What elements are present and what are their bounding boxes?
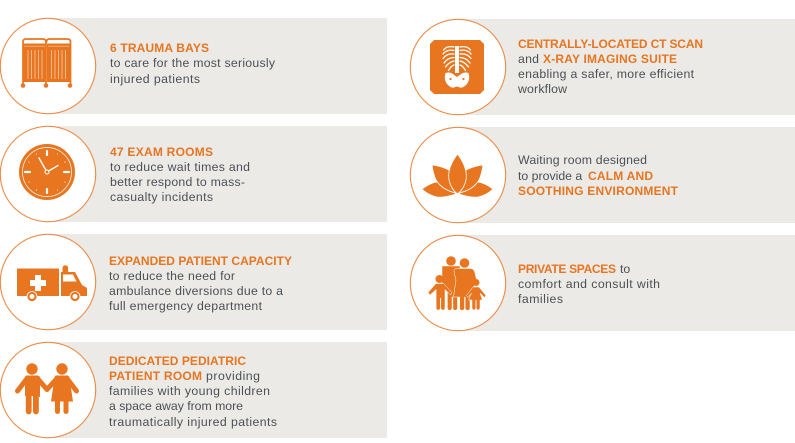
panel: exam rooms bbox=[0, 126, 387, 222]
text: exam rooms bbox=[110, 145, 250, 204]
icon: two children bbox=[18, 363, 76, 412]
text: patient capacity bbox=[109, 254, 292, 313]
text: exam rooms: 47 EXAM ROOMS bbox=[110, 145, 213, 159]
text: CT scan and X-ray: and bbox=[518, 52, 539, 66]
text: exam rooms: casualty incidents bbox=[110, 190, 213, 204]
icon: x-ray bbox=[430, 40, 484, 94]
text: patient capacity: full emergency department bbox=[109, 299, 263, 313]
text: pediatric room: a space away from more bbox=[109, 399, 243, 413]
text: private spaces: to bbox=[620, 262, 630, 276]
text: CT scan and X-ray: X-RAY IMAGING SUITE bbox=[543, 52, 677, 66]
text: pediatric room: DEDICATED PEDIATRIC bbox=[109, 354, 246, 368]
text: patient capacity: ambulance diversions due to a bbox=[109, 284, 283, 298]
text: private spaces: PRIVATE SPACES bbox=[518, 262, 616, 276]
text: CT scan and X-ray: CENTRALLY-LOCATED CT SCAN bbox=[518, 37, 703, 51]
text: trauma bays: 6 TRAUMA BAYS bbox=[110, 41, 209, 55]
text: CT scan and X-ray: enabling a safer, more efficient bbox=[518, 67, 695, 81]
text: waiting room: SOOTHING ENVIRONMENT bbox=[518, 184, 679, 198]
text: trauma bays bbox=[110, 41, 276, 86]
icon: privacy screens bbox=[21, 39, 72, 88]
icon: ambulance bbox=[17, 265, 87, 302]
text: waiting room: CALM AND bbox=[588, 169, 653, 183]
text: waiting room: Waiting room designed bbox=[518, 153, 647, 167]
text: pediatric room: providing bbox=[206, 369, 260, 383]
icon: lotus bbox=[422, 154, 493, 197]
text: pediatric room: PATIENT ROOM bbox=[109, 369, 202, 383]
text: patient capacity: to reduce the need for bbox=[109, 269, 235, 283]
panel: patient capacity bbox=[0, 234, 387, 330]
text: pediatric room: traumatically injured patients bbox=[109, 415, 277, 429]
text: pediatric room: families with young children bbox=[109, 384, 270, 398]
panel: pediatric room bbox=[0, 342, 387, 438]
text: private spaces: families bbox=[518, 292, 563, 306]
text: waiting room: to provide a bbox=[518, 169, 582, 183]
text: patient capacity: EXPANDED PATIENT CAPACITY bbox=[109, 254, 292, 268]
panel: trauma bays bbox=[0, 18, 387, 114]
text: private spaces: comfort and consult with bbox=[518, 277, 660, 291]
text: trauma bays: injured patients bbox=[110, 72, 200, 86]
text: private spaces bbox=[518, 262, 660, 306]
text: exam rooms: to reduce wait times and bbox=[110, 160, 250, 174]
text: CT scan and X-ray: workflow bbox=[517, 82, 567, 96]
text: CT scan and X-ray bbox=[517, 37, 703, 96]
text: trauma bays: to care for the most seriously bbox=[110, 56, 276, 70]
text: exam rooms: better respond to mass- bbox=[110, 175, 245, 189]
icon: family bbox=[428, 256, 486, 310]
icon: clock bbox=[19, 144, 75, 200]
panel: private spaces bbox=[410, 235, 795, 331]
panel: waiting room bbox=[410, 127, 795, 223]
text: waiting room bbox=[518, 153, 679, 198]
text: pediatric room bbox=[109, 354, 277, 429]
panel: CT scan and X-ray bbox=[410, 19, 795, 115]
